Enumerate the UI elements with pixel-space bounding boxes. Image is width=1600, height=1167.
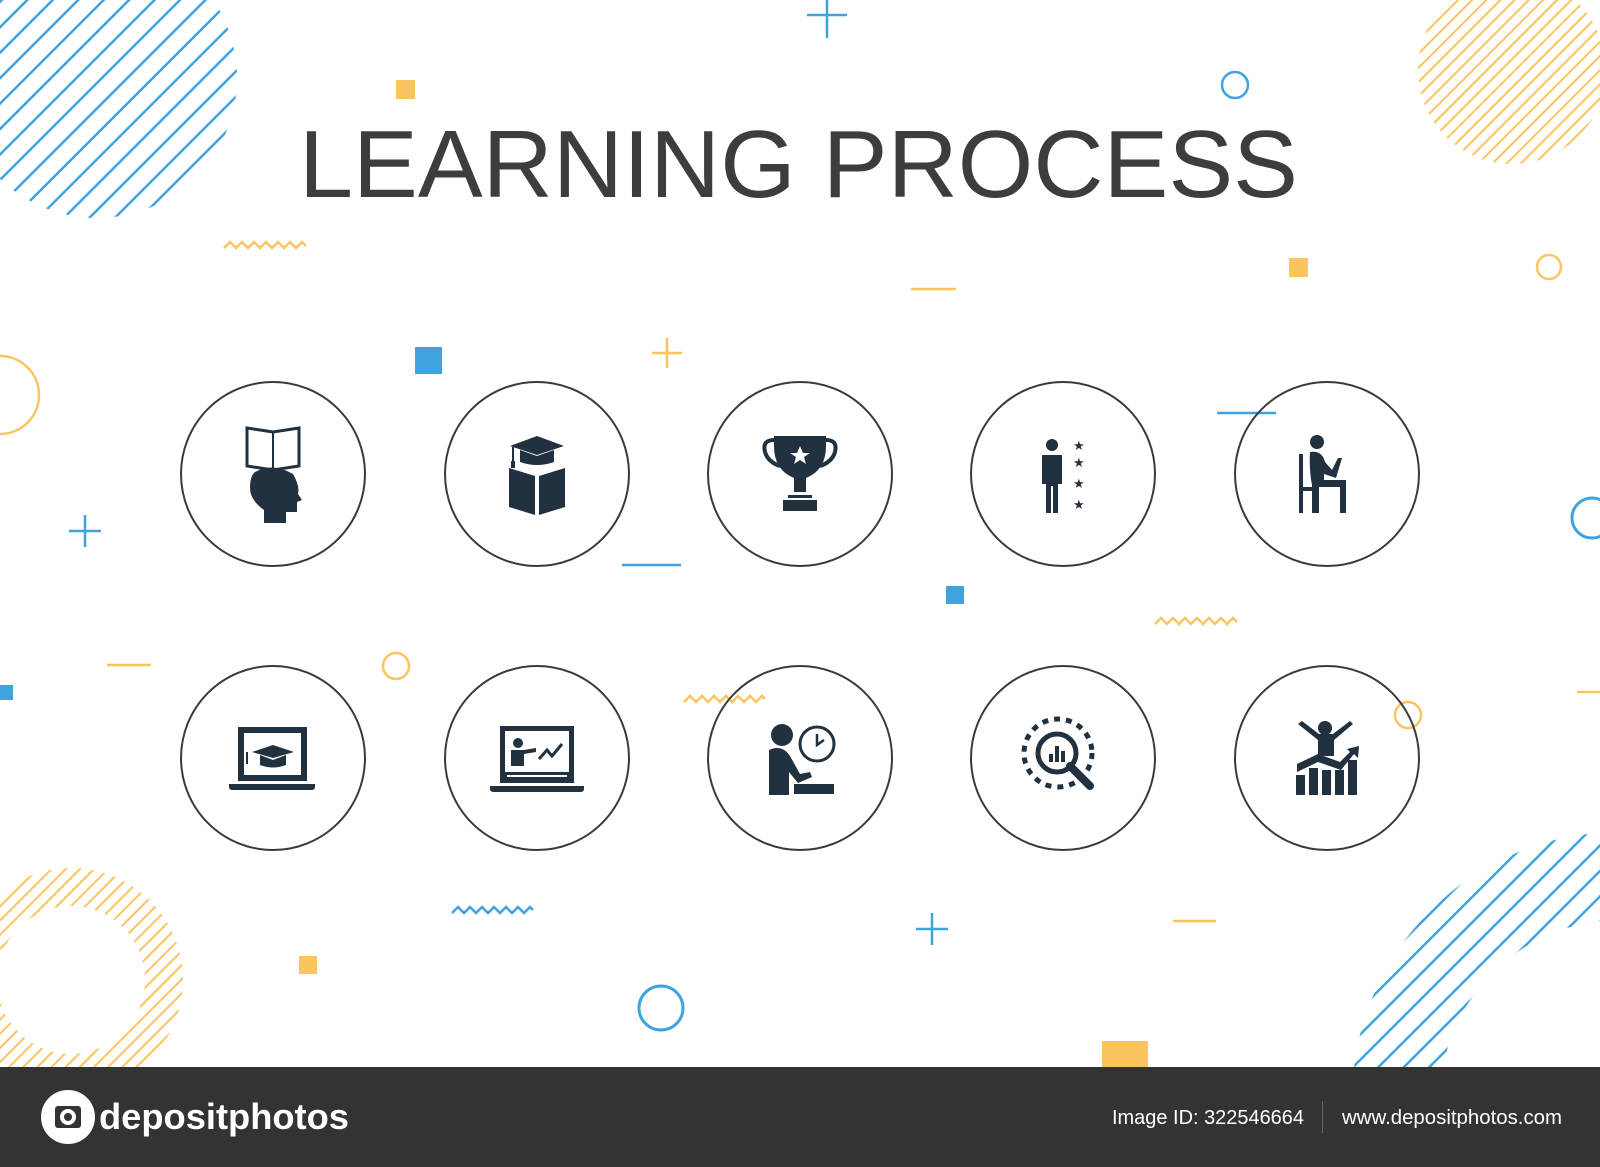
- decoration: bottom-left orange hatched ring: [0, 868, 183, 1067]
- icon: head with book: [247, 428, 302, 523]
- icon: laptop with presentation: [490, 726, 584, 792]
- icon: magnifier with chart: [1024, 719, 1092, 787]
- decoration: bottom-right blue hatched ring: [1354, 834, 1600, 1067]
- icon: laptop with graduation cap: [229, 727, 315, 790]
- icon: person reading on chair: [1299, 435, 1346, 513]
- footer logo: [41, 1090, 349, 1144]
- icon: graduation cap on book: [509, 436, 565, 515]
- icon: trophy with star: [764, 436, 836, 511]
- icon: person with clock writing: [769, 724, 834, 795]
- title: LEARNING PROCESS: [299, 111, 1298, 218]
- icon: person with stars: [1042, 439, 1085, 513]
- icon: person celebrating on growth chart: [1296, 721, 1359, 795]
- icon: person with stars: ★: [1073, 439, 1085, 454]
- footer url: www.depositphotos.com: [1341, 1107, 1562, 1129]
- footer logo: depositphotos: [99, 1096, 349, 1137]
- footer image id: Image ID: 322546664: [1112, 1107, 1304, 1129]
- icon circles: [181, 382, 1419, 850]
- decoration: top-left blue hatched circle: [0, 0, 237, 218]
- footer bar: [0, 1067, 1600, 1167]
- icon: person with stars: ★: [1073, 456, 1085, 471]
- icon: person with stars: ★: [1073, 498, 1085, 513]
- icon: person with stars: ★: [1073, 477, 1085, 492]
- decoration: top-right orange hatched circle: [1418, 0, 1600, 164]
